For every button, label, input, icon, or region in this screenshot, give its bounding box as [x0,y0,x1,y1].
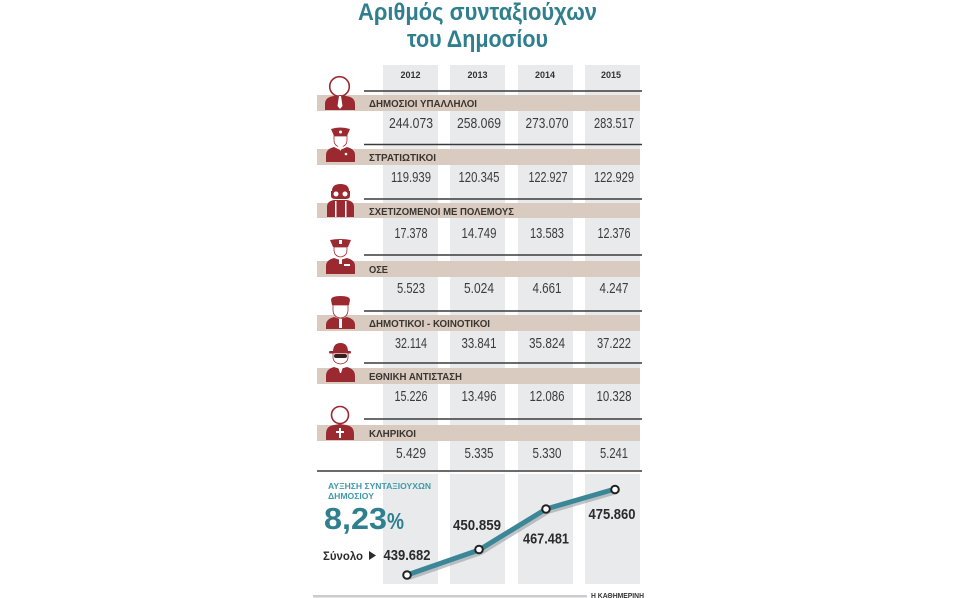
row: public employees: 283.517 [594,116,634,132]
year headers: 2015 [601,70,621,80]
total divider [317,470,642,472]
year headers: 2012 [400,70,421,80]
row: national resistance: 15.226 [394,389,428,405]
row: municipal: ΔΗΜΟΤΙΚΟΙ - ΚΟΙΝΟΤΙΚΟΙ [369,319,490,330]
row: war related [317,199,642,242]
row: military: 122.927 [528,170,568,186]
row: war related: 12.376 [598,226,630,242]
icon: soldier [326,128,355,162]
line chart: total pensioners [384,486,636,579]
row: municipal: 32.114 [395,336,427,352]
row: military: 119.939 [391,170,431,186]
row: railways OSE [317,255,642,297]
row: military: ΣΤΡΑΤΙΩΤΙΚΟΙ [369,153,436,164]
year headers: 2013 [467,70,488,80]
icon: clergy member [326,406,354,440]
row: national resistance [317,363,642,405]
row: railways OSE: 5.523 [397,281,425,297]
icon: railway worker [326,239,355,274]
row: municipal [317,311,642,352]
row: public employees: 273.070 [526,116,568,132]
row: municipal: 37.222 [597,336,631,352]
row: war related: 14.749 [462,226,496,242]
row: public employees [317,91,642,132]
row: national resistance: 13.496 [462,389,496,405]
row: railways OSE: 4.247 [600,281,628,297]
callout: growth rate: ΔΗΜΟΣΙΟΥ [328,491,374,501]
row: clergy: 5.429 [396,446,426,462]
line chart: total pensioners: 439.682 [384,548,430,564]
callout: growth rate: ΑΥΞΗΣΗ ΣΥΝΤΑΞΙΟΥΧΩΝ [328,481,431,491]
row: railways OSE: 4.661 [532,281,562,297]
callout: growth rate [324,481,431,536]
year headers: 2014 [535,70,555,80]
icon: veteran [327,184,354,217]
row: public employees: 258.069 [457,116,501,132]
title [358,0,597,53]
row: war related: ΣΧΕΤΙΖΟΜΕΝΟΙ ΜΕ ΠΟΛΕΜΟΥΣ [369,207,514,218]
icon: civil servant [325,77,355,110]
row: clergy [317,419,642,462]
row: clergy: 5.330 [532,446,562,462]
row: clergy: 5.241 [600,446,628,462]
line chart: total pensioners: 450.859 [453,518,501,534]
year column backgrounds [383,65,640,584]
line chart: total pensioners: 475.860 [588,507,636,523]
row: railways OSE: 5.024 [464,281,494,297]
row: municipal: 35.824 [529,336,565,352]
row: public employees: 244.073 [389,116,433,132]
row: national resistance: ΕΘΝΙΚΗ ΑΝΤΙΣΤΑΣΗ [369,372,462,383]
row: military: 122.929 [594,170,634,186]
icon: resistance member [326,343,355,382]
year headers [400,70,621,80]
row: railways OSE: ΟΣΕ [369,265,388,276]
title: του Δημοσίου [407,26,548,53]
row: war related: 13.583 [530,226,564,242]
line chart: total pensioners: 467.481 [523,532,569,548]
row: clergy: 5.335 [464,446,494,462]
row: military: 120.345 [458,170,500,186]
row: clergy: ΚΛΗΡΙΚΟΙ [369,429,416,440]
callout: growth rate: % [387,508,404,534]
row: public employees: ΔΗΜΟΣΙΟΙ ΥΠΑΛΛΗΛΟΙ [369,99,477,110]
row: national resistance: 10.328 [596,389,632,405]
footer rule [313,595,587,598]
callout: growth rate: 8,23 [324,501,387,536]
row: war related: 17.378 [394,226,428,242]
icon: municipal worker [326,296,355,329]
row: military [317,144,642,186]
label: total: Σύνολο [323,549,363,563]
row: national resistance: 12.086 [530,389,564,405]
row: municipal: 33.841 [462,336,496,352]
